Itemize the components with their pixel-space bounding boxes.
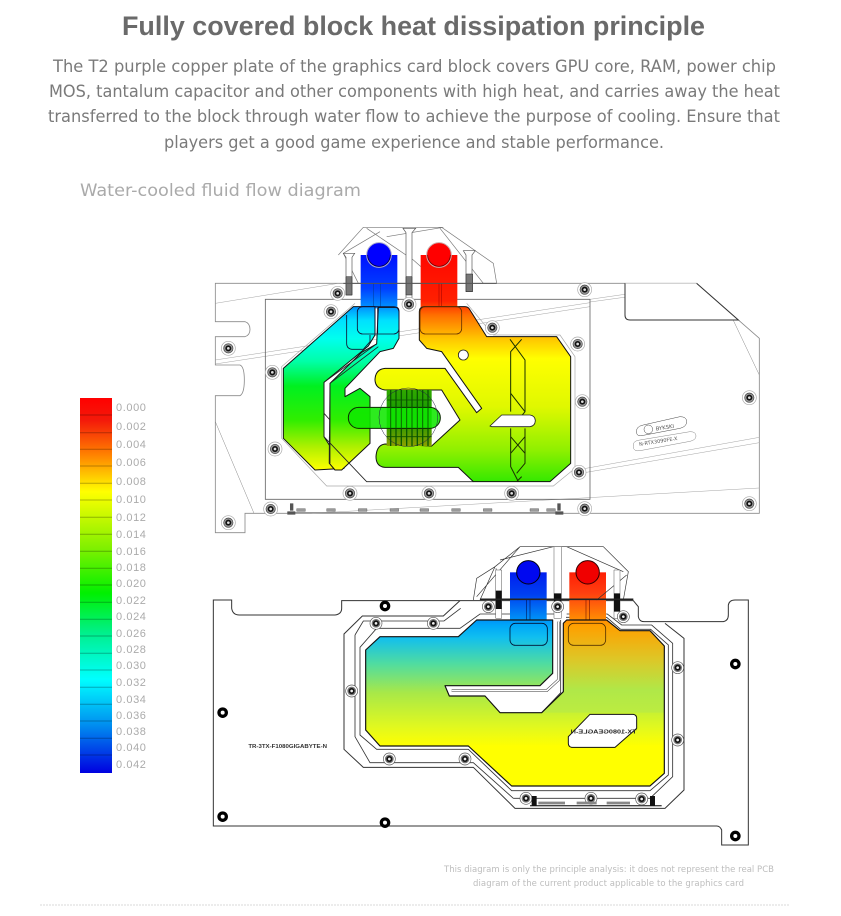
legend values: 0.002 [116, 421, 147, 433]
bottom diagram: graphics card water block rear [213, 547, 748, 845]
legend values: 0.042 [116, 759, 147, 771]
logo plates [633, 417, 696, 451]
fluid chamber, full fill [366, 620, 664, 786]
backplate outline [213, 600, 748, 845]
legend values: 0.034 [116, 694, 147, 706]
footnote: diagram of the current product applicable to the graphics card [473, 879, 744, 889]
legend colour bar [80, 398, 112, 773]
legend values: 0.036 [116, 710, 147, 722]
model text on plate: TR-3TX-F1080GIGABYTE-N [248, 744, 327, 750]
screws [221, 283, 756, 530]
footnote [443, 865, 774, 889]
fitting housing, rear [473, 547, 628, 600]
legend values: 0.038 [116, 726, 147, 738]
card outline [215, 283, 759, 533]
mirrored model text in hole: TX-1080GEAGLE-N [571, 730, 637, 736]
intro paragraph: MOS, tantalum capacitor and other components with high heat, and carries away the heat [49, 82, 780, 102]
intro paragraph: transferred to the block through water flow to achieve the purpose of cooling. Ensure that [48, 107, 780, 127]
cold water channel, left section [283, 307, 375, 470]
intro paragraph [48, 57, 780, 153]
cold port, rear [510, 561, 547, 626]
screws on housing [343, 228, 497, 300]
legend values: 0.014 [116, 529, 147, 541]
legend values: 0.026 [116, 628, 147, 640]
hot port, rear [569, 561, 606, 626]
fluid chamber outline [366, 620, 664, 786]
legend values: 0.030 [116, 660, 147, 672]
legend values: 0.032 [116, 677, 147, 689]
cold water channel, right section [329, 307, 399, 470]
round hole [458, 350, 468, 360]
intro paragraph: players get a good game experience and stable performance. [164, 133, 664, 153]
fluid chamber, hot side [542, 620, 664, 713]
legend values: 0.040 [116, 742, 147, 754]
legend values: 0.012 [116, 512, 147, 524]
cut-out at top right of card [625, 283, 738, 320]
legend values: 0.024 [116, 611, 147, 623]
legend values: 0.000 [116, 402, 147, 414]
legend values: 0.004 [116, 439, 147, 451]
screws, rear housing [480, 547, 633, 618]
bottom connector strip [287, 503, 563, 515]
cold inlet port [361, 243, 397, 308]
intro paragraph: The T2 purple copper plate of the graphics card block covers GPU core, RAM, power chip [52, 57, 776, 77]
top diagram: graphics card water block front [215, 227, 759, 533]
legend: colour scale [80, 398, 147, 773]
slot hole [490, 415, 535, 427]
legend values [116, 402, 147, 771]
legend values: 0.006 [116, 457, 147, 469]
legend values: 0.010 [116, 494, 147, 506]
model label hole [568, 714, 637, 747]
centre tube [348, 388, 440, 447]
rear connector strip [530, 796, 662, 806]
channel overlay outlines [324, 307, 525, 482]
hot water channel [375, 307, 571, 482]
legend values: 0.018 [116, 562, 147, 574]
slot divider line [452, 622, 558, 691]
legend values: 0.016 [116, 546, 147, 558]
fitting housing [338, 227, 497, 283]
nuts and screws [219, 601, 739, 840]
port overlays, rear [510, 623, 606, 645]
legend values: 0.022 [116, 595, 147, 607]
logo plates: N-RTX3090FE-X [639, 436, 678, 448]
section heading: Water-cooled fluid flow diagram [80, 181, 361, 200]
legend values: 0.008 [116, 476, 147, 488]
fin block in centre [387, 390, 432, 446]
legend values: 0.020 [116, 578, 147, 590]
hot outlet port [421, 243, 457, 308]
legend values: 0.028 [116, 644, 147, 656]
footnote: This diagram is only the principle analysis: it does not represent the real PCB [443, 865, 774, 875]
raised block outline [344, 601, 684, 808]
title: Fully covered block heat dissipation principle [122, 11, 705, 41]
logo plates: BYKSKI [655, 424, 675, 433]
